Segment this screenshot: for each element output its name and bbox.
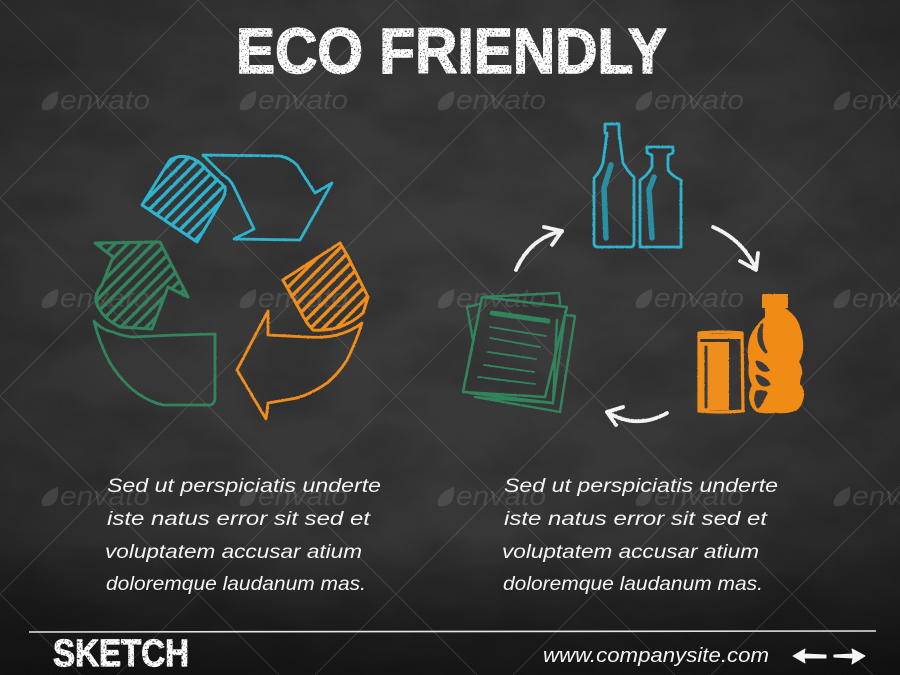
- orange hatched segment: [283, 243, 368, 330]
- left text block: iste natus error sit sed et: [107, 509, 371, 530]
- icon: right arrow: [834, 649, 865, 664]
- envato watermarks: envato: [654, 481, 744, 511]
- right text block: doloremque laudanum mas.: [503, 574, 763, 595]
- green hatched arrow: [95, 242, 188, 329]
- envato watermarks: envato: [654, 283, 744, 313]
- envato watermarks: envato: [60, 283, 150, 313]
- orange outlined arrow: [237, 311, 362, 419]
- footer divider: [29, 631, 876, 632]
- navigation arrows: [793, 649, 865, 664]
- blue hatched segment: [142, 156, 225, 242]
- green outlined segment: [94, 321, 215, 405]
- envato watermarks: envato: [654, 85, 744, 115]
- right text block: voluptatem accusar atium: [502, 542, 759, 563]
- left text block: Sed ut perspiciatis underte: [107, 476, 381, 497]
- recycling symbol: [94, 155, 368, 419]
- left text block: doloremque laudanum mas.: [106, 574, 366, 595]
- icon: can and plastic bottle: [699, 294, 804, 413]
- envato watermarks: envato: [258, 481, 348, 511]
- envato watermarks: envato: [60, 481, 150, 511]
- left text block: [105, 476, 381, 595]
- title: ECO FRIENDLY: [236, 15, 667, 87]
- right text block: [502, 476, 778, 595]
- envato watermarks: envato: [456, 481, 546, 511]
- blue outlined arrow: [203, 155, 332, 240]
- right text block: iste natus error sit sed et: [504, 509, 768, 530]
- envato watermarks: envato: [258, 85, 348, 115]
- arrow: bottles to cans: [713, 227, 758, 270]
- recycling cycle diagram: [463, 124, 804, 425]
- icon: glass bottles: [594, 124, 681, 247]
- right text block: Sed ut perspiciatis underte: [504, 476, 778, 497]
- footer website: www.companysite.com: [543, 645, 769, 667]
- arrow: paper to bottles: [516, 227, 562, 270]
- icon: paper sheets: [463, 293, 575, 412]
- footer brand: SKETCH: SKETCH: [53, 633, 189, 675]
- envato watermarks: envato: [456, 85, 546, 115]
- left text block: voluptatem accusar atium: [105, 542, 362, 563]
- icon: left arrow: [793, 649, 826, 663]
- envato watermarks: envato: [258, 283, 348, 313]
- arrow: cans to paper: [607, 407, 667, 425]
- envato watermarks: [42, 85, 900, 511]
- envato watermarks: envato: [456, 283, 546, 313]
- envato watermarks: envato: [60, 85, 150, 115]
